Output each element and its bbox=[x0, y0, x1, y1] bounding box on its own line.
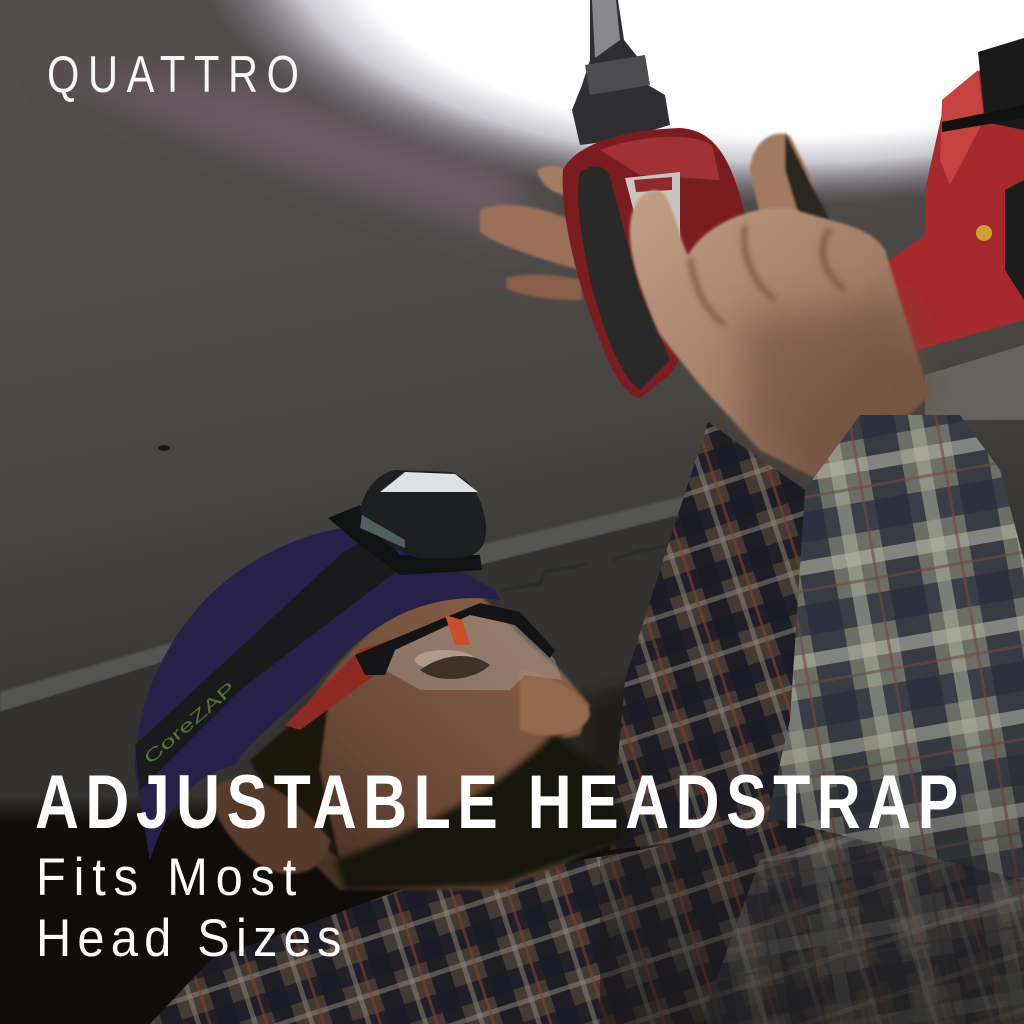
worker's head bbox=[212, 585, 630, 890]
safety glasses bbox=[285, 603, 562, 730]
headstrap with brand text: LT bbox=[361, 530, 384, 553]
fingers behind drill bbox=[480, 132, 832, 300]
drill body bbox=[563, 128, 745, 398]
drill bbox=[563, 0, 1024, 398]
drill rear and battery bbox=[860, 70, 1024, 352]
plaid shirt: far arm sleeve bbox=[610, 422, 805, 850]
beard bbox=[335, 732, 630, 890]
headstrap with brand text: CoreZAP bbox=[140, 678, 239, 768]
face bbox=[250, 585, 620, 890]
ear bbox=[212, 778, 330, 874]
headstrap with brand text bbox=[135, 530, 398, 790]
plaid shirt: chest bbox=[150, 820, 1024, 1024]
plaid shirt: near sleeve bbox=[760, 415, 1024, 1024]
nose bbox=[520, 670, 590, 735]
cap bbox=[135, 526, 500, 860]
subheading: Fits Most Head Sizes bbox=[36, 847, 341, 967]
subheading: Fits Most Head Sizes: Fits Most bbox=[36, 847, 296, 906]
ceiling writing bbox=[500, 544, 676, 590]
subheading: Fits Most Head Sizes: Head Sizes bbox=[36, 908, 341, 967]
brand label: QUATTRO: QUATTRO bbox=[47, 45, 299, 103]
heading: ADJUSTABLE HEADSTRAP: ADJUSTABLE HEADSTRAP bbox=[35, 760, 958, 845]
headlamp bbox=[328, 470, 486, 575]
gripping hand bbox=[630, 190, 930, 478]
hair and neck shadow bbox=[250, 690, 340, 860]
drill chuck bbox=[572, 0, 670, 145]
